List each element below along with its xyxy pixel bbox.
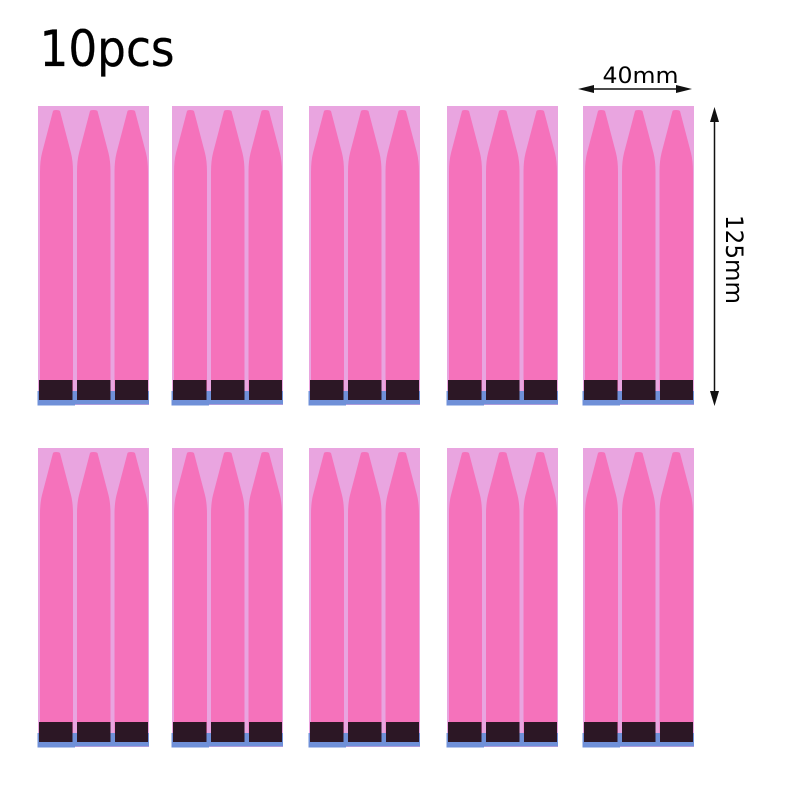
- sheet row 1 column 1: [38, 106, 149, 406]
- arrow: height dimension: [710, 107, 719, 406]
- sheet row 2 column 2: [172, 448, 283, 748]
- height dimension label: 125mm: [720, 215, 748, 304]
- sheet row 1 column 2: [172, 106, 283, 406]
- width dimension label: 40mm: [602, 64, 678, 89]
- sheet row 2 column 4: [446, 448, 558, 748]
- title: 10pcs: [40, 20, 174, 78]
- sheet row 2 column 5: [582, 448, 694, 748]
- sheet row 1 column 5: [582, 106, 694, 406]
- sheet row 2 column 1: [38, 448, 149, 748]
- sheet row 2 column 3: [308, 448, 420, 748]
- sheet row 1 column 4: [446, 106, 558, 406]
- arrow: width dimension: [578, 85, 692, 93]
- sheet row 1 column 3: [308, 106, 420, 406]
